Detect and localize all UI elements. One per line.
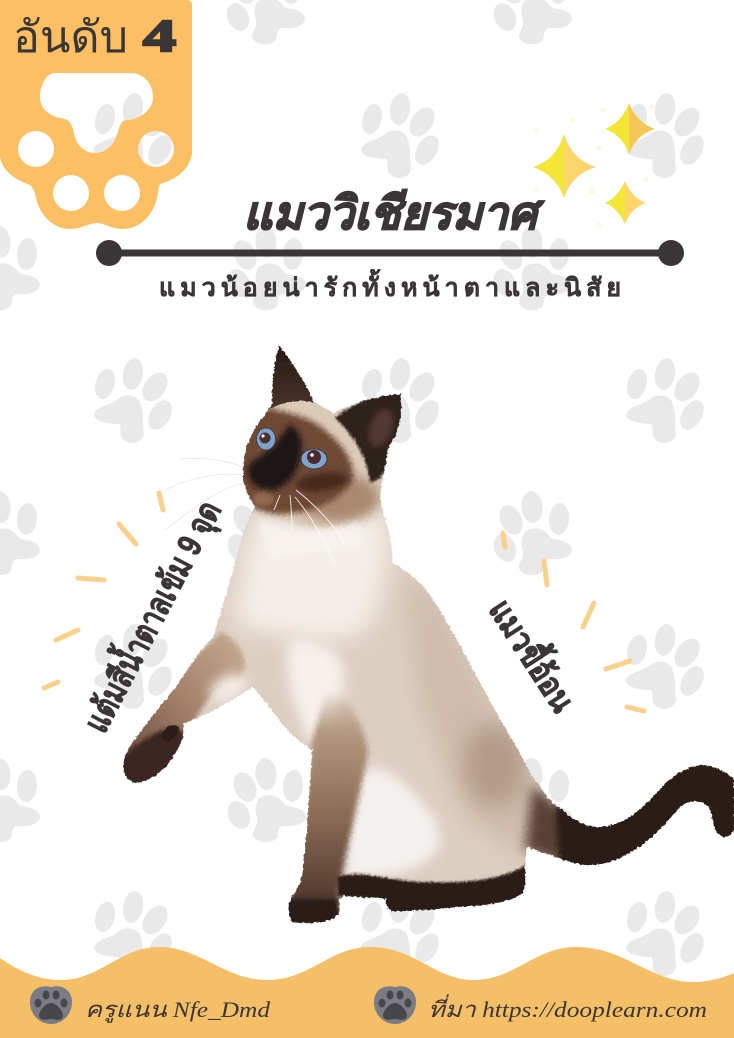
subtitle: แมวน้อยน่ารักทั้งหน้าตาและนิสัย xyxy=(159,268,621,302)
right ear xyxy=(335,390,405,482)
right callout text: แมวขี้อ้อน xyxy=(482,589,587,719)
author name: ครูแนน Nfe_Dmd xyxy=(85,997,271,1023)
icon: grey paw xyxy=(30,986,72,1024)
rank badge xyxy=(0,0,192,229)
title: แมววิเชียรมาศ xyxy=(243,187,545,239)
muzzle xyxy=(248,425,302,490)
lower sparkle xyxy=(605,181,625,224)
neck light xyxy=(260,520,360,540)
front foot xyxy=(285,897,342,925)
footer wave xyxy=(0,947,734,1038)
large sparkle xyxy=(533,134,564,198)
icon: grey paw xyxy=(374,986,416,1024)
right accent ticks xyxy=(503,533,644,711)
arm paw xyxy=(120,729,185,790)
badge paw shape xyxy=(0,0,192,229)
cat body xyxy=(120,340,734,930)
right eye xyxy=(301,449,327,469)
lower cheek tan xyxy=(296,474,380,522)
tail base xyxy=(525,785,575,870)
left eye xyxy=(256,428,276,450)
whiskers on chest xyxy=(274,490,345,565)
footer source xyxy=(374,986,707,1024)
left ear xyxy=(268,342,318,410)
footer credit xyxy=(30,986,271,1024)
cat photo xyxy=(120,340,734,930)
chest fur xyxy=(235,500,387,640)
chin xyxy=(252,492,274,506)
back shading xyxy=(405,575,535,860)
haunch shading xyxy=(463,723,527,807)
rear feet xyxy=(338,862,530,915)
title rule with end dots xyxy=(96,240,684,266)
inner arm light xyxy=(205,668,251,708)
tail xyxy=(552,764,734,866)
foreleg xyxy=(290,690,368,900)
left accent ticks xyxy=(44,493,163,688)
raised arm xyxy=(120,632,244,790)
sparkles xyxy=(533,103,655,228)
top sparkle xyxy=(605,103,629,154)
left callout text: แต้มสีน้ำตาลเข้ม 9 จุด xyxy=(71,492,231,740)
lower chest fur xyxy=(287,640,345,745)
face mask xyxy=(230,405,353,514)
rank number: 4 xyxy=(143,10,176,61)
whiskers on background xyxy=(165,458,243,530)
under-eye shadow xyxy=(295,469,349,495)
belly fur xyxy=(345,768,440,878)
rank label: อันดับ xyxy=(13,13,128,62)
head base xyxy=(242,401,366,528)
source url: ที่มา https://dooplearn.com xyxy=(428,994,707,1022)
small glints xyxy=(534,104,654,228)
